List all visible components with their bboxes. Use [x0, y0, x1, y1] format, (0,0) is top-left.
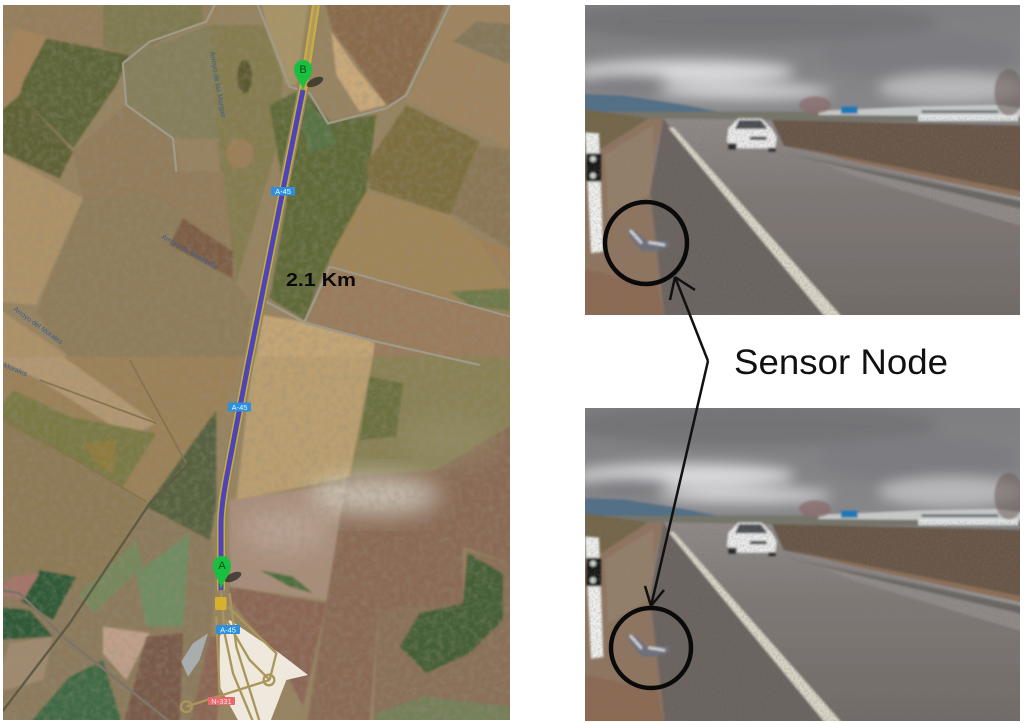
road shields: A-45 [275, 187, 291, 196]
marker B: B [299, 64, 307, 76]
lower tracks [0, 360, 190, 722]
photo: road with sensor node (top) [585, 5, 1020, 315]
road shields: A-45 [220, 626, 236, 634]
water labels: Arroyo del Morales [12, 306, 64, 346]
road corridor and route [221, 5, 316, 590]
water labels: Arroyo de las Murgas [208, 51, 227, 118]
road shields [208, 187, 295, 706]
cloud haze [240, 415, 500, 552]
label: Sensor Node: Sensor Node [734, 343, 948, 382]
arrow to top sensor [670, 277, 708, 361]
water labels: Morales [2, 362, 28, 378]
marker A [213, 556, 243, 590]
road shields: A-45 [232, 403, 247, 412]
photo: road with sensor node (bottom) [585, 408, 1020, 721]
field patches, lower half [0, 357, 520, 723]
marker B [294, 60, 325, 91]
water labels [2, 51, 227, 378]
map: aerial satellite view of road [0, 0, 520, 723]
circle highlighting sensor node (bottom) [611, 608, 691, 688]
interchange [181, 593, 308, 723]
water labels: Arroyo de Sandávila [160, 234, 218, 271]
field tracks and side roads [123, 2, 510, 365]
arrow to bottom sensor [645, 361, 708, 606]
distance label: 2.1 Km [286, 270, 356, 290]
marker A: A [218, 560, 226, 572]
road shields: N-331 [211, 697, 232, 706]
circle highlighting sensor node (top) [605, 202, 687, 284]
field patches, upper half [0, 0, 520, 372]
grain texture [3, 5, 510, 720]
